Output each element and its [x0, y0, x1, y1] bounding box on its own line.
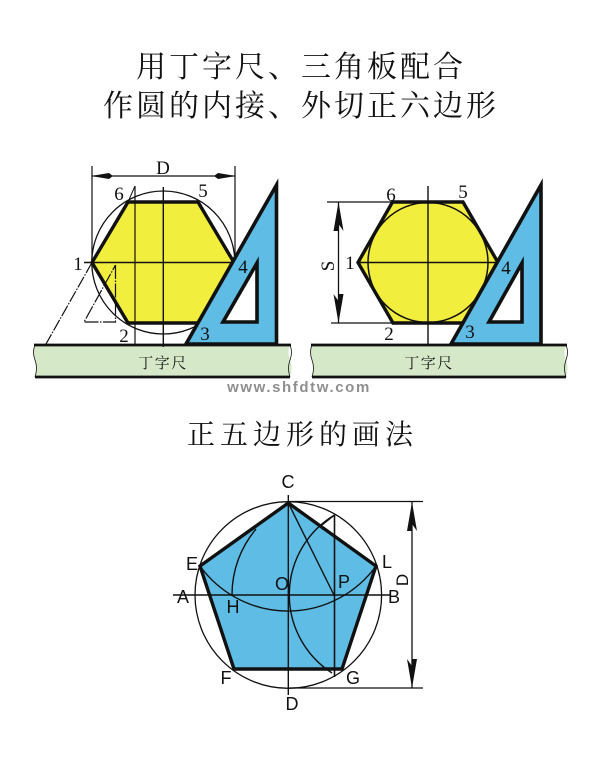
- vertex labels: 1: [345, 253, 355, 274]
- dimension D: D: [393, 574, 412, 586]
- construction arcs and lines: [173, 495, 390, 695]
- T-square ruler, left: 丁字尺: [138, 355, 188, 372]
- inscribed hexagon: [92, 202, 234, 323]
- dimension D: [92, 158, 235, 262]
- vertex labels: 6: [114, 184, 124, 205]
- T-square ruler, right: 丁字尺: [404, 355, 454, 372]
- dimension S: [318, 202, 393, 323]
- vertex labels: 6: [386, 185, 396, 206]
- set square, left: [186, 185, 276, 344]
- watermark: www.shfdtw.com: [226, 379, 371, 396]
- vertex labels: 4: [238, 257, 248, 278]
- point labels: G: [346, 668, 360, 688]
- point labels: E: [186, 554, 198, 574]
- panel: pentagon construction: [173, 472, 423, 714]
- T-square ruler, right: [310, 345, 568, 377]
- dimension D: D: [156, 158, 170, 179]
- set square, right: [451, 185, 541, 344]
- point labels: C: [282, 472, 294, 492]
- center lines: [358, 186, 498, 345]
- dimension S: S: [318, 261, 339, 271]
- inscribed circle: [368, 202, 488, 322]
- point labels: O: [275, 574, 289, 594]
- construction lines: [46, 186, 234, 347]
- point labels: B: [388, 587, 400, 607]
- circumscribed hexagon: [358, 202, 498, 323]
- point labels: F: [220, 668, 232, 688]
- vertex labels: 3: [465, 322, 475, 343]
- vertex labels: 1: [73, 254, 83, 275]
- vertex labels: 3: [200, 324, 210, 345]
- point labels: D: [286, 694, 298, 714]
- T-square ruler, left: [34, 345, 292, 377]
- panel: inscribed hexagon: [34, 158, 292, 377]
- pentagon: [200, 503, 376, 669]
- point labels: [177, 472, 400, 714]
- point labels: A: [177, 587, 189, 607]
- point labels: L: [382, 552, 392, 572]
- point labels: H: [226, 597, 240, 617]
- circumscribed circle: [92, 191, 235, 334]
- vertex labels: 5: [458, 182, 468, 203]
- vertex labels: [345, 182, 511, 345]
- vertex labels: 4: [501, 258, 511, 279]
- heading: pentagon: 正五边形的画法: [187, 419, 418, 451]
- title: [103, 51, 499, 123]
- vertex labels: [73, 181, 248, 347]
- circle: [195, 502, 382, 688]
- point labels: P: [338, 572, 350, 592]
- vertex labels: 2: [384, 324, 394, 345]
- title: 用丁字尺、三角板配合: [136, 51, 466, 84]
- vertex labels: 2: [119, 326, 129, 347]
- dimension D: [288, 502, 423, 688]
- title: 作圆的内接、外切正六边形: [103, 90, 499, 123]
- vertex labels: 5: [198, 181, 208, 202]
- panel: circumscribed hexagon: [310, 182, 568, 377]
